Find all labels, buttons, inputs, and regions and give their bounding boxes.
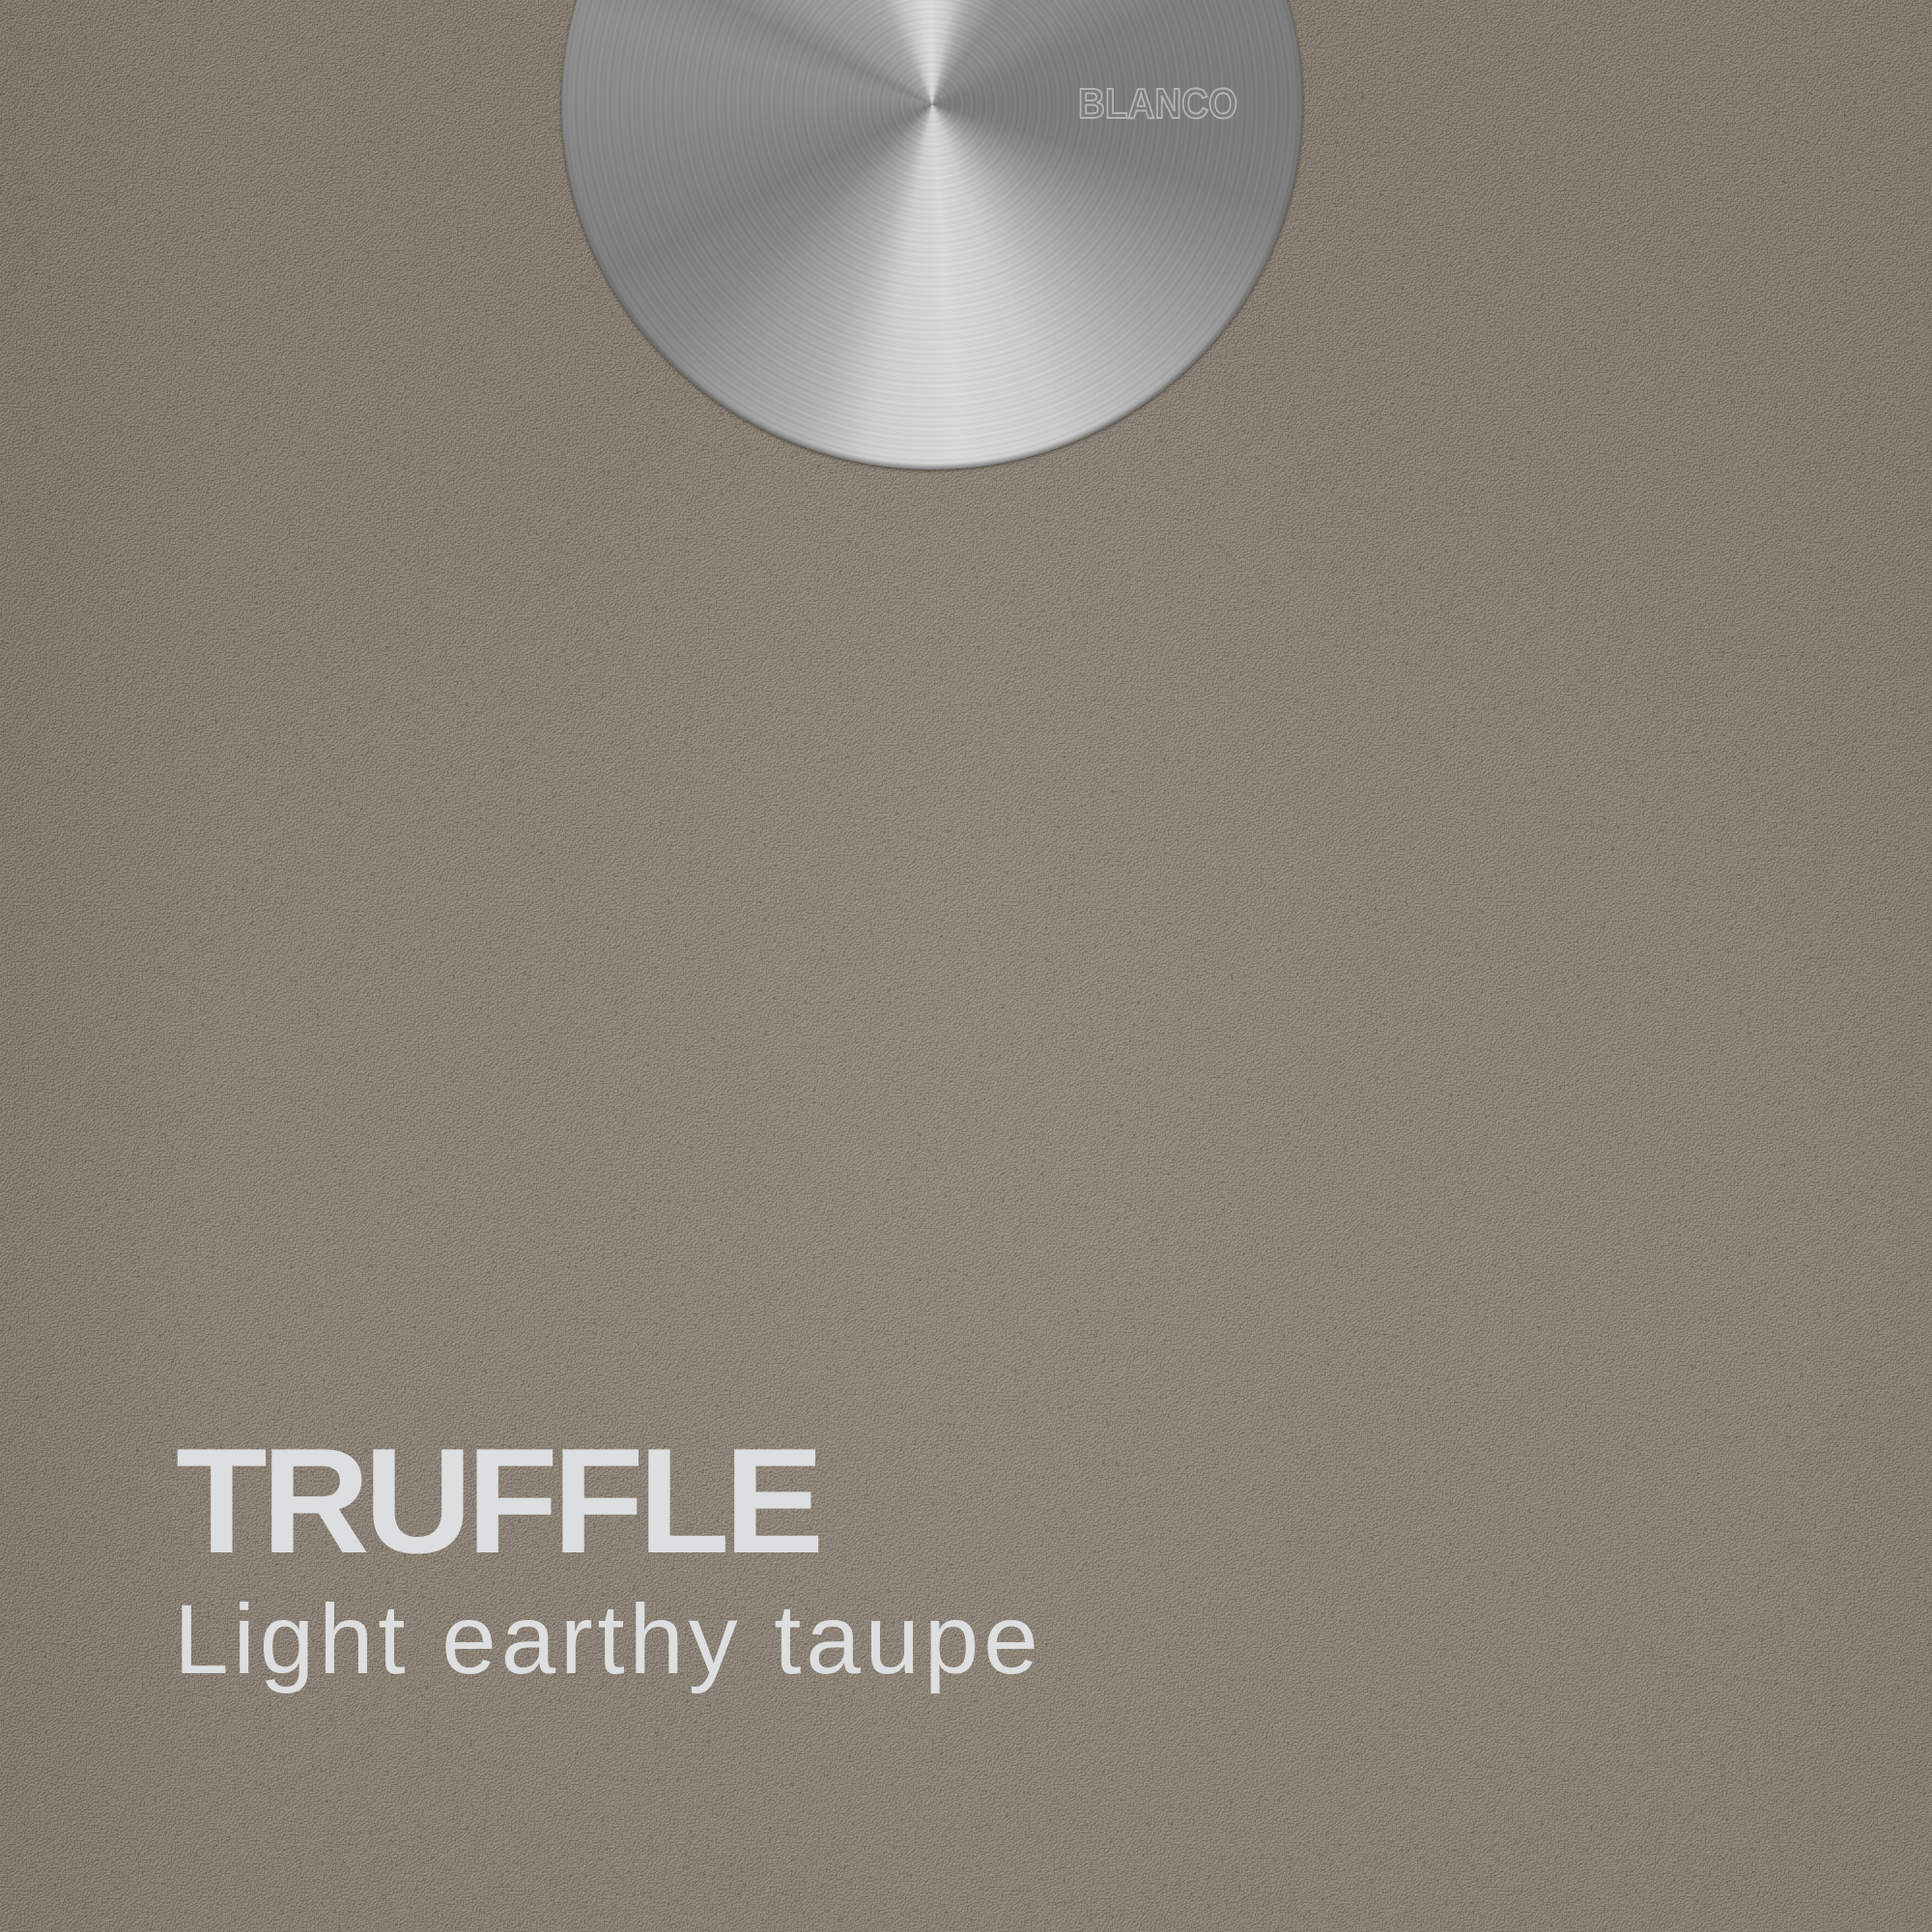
icon: brushed stainless steel drain cover [561, 0, 1303, 469]
title: TRUFFLE [176, 1417, 818, 1584]
subtitle: Light earthy taupe [174, 1584, 1042, 1694]
